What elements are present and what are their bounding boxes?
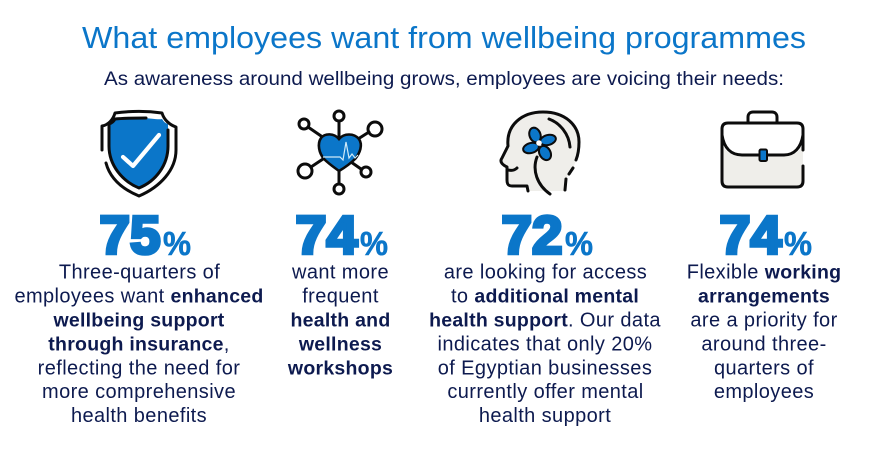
text: flexible working description: arrangements [698, 286, 830, 308]
text: mental health description: currently offer mental [447, 381, 644, 403]
text: mental health description: to additional mental [451, 286, 639, 308]
stat: 72%: 72 [502, 206, 562, 266]
text: flexible working description [687, 262, 841, 403]
text: flexible working description: employees [714, 381, 814, 403]
text: insurance description: more comprehensive [42, 381, 236, 403]
text: workshops description: workshops [287, 358, 393, 380]
icon: briefcase [722, 112, 803, 187]
stat: 74% [720, 206, 812, 266]
icon: shield with check [102, 112, 176, 196]
text: mental health description: health support [479, 405, 611, 427]
text: mental health description: are looking for access [444, 262, 647, 284]
stat: 74%: 74 [720, 206, 782, 266]
stat: 74%: % [784, 225, 812, 262]
subtitle: As awareness around wellbeing grows, employees are voicing their needs: [104, 68, 784, 90]
icon: heart network [298, 111, 382, 194]
text: mental health description: of Egyptian businesses [438, 358, 652, 380]
text: insurance description [14, 262, 264, 427]
panel: insurance support [14, 112, 264, 427]
stat: 75% [100, 206, 191, 266]
panel: workshops [287, 111, 393, 380]
text: insurance description: through insurance, [48, 334, 230, 356]
text: insurance description: Three-quarters of [59, 262, 220, 284]
text: insurance description: wellbeing support [52, 310, 225, 332]
stat: 72% [502, 206, 593, 266]
stat: 74%: 74 [296, 206, 358, 266]
text: mental health description [429, 262, 661, 427]
text: flexible working description: around three- [701, 334, 827, 356]
icon: head with flower [501, 112, 579, 194]
text: workshops description [287, 262, 393, 380]
text: workshops description: health and [290, 310, 391, 332]
text: flexible working description: are a priority for [690, 310, 838, 332]
text: workshops description: frequent [302, 286, 379, 308]
text: insurance description: reflecting the need for [38, 358, 240, 380]
text: workshops description: want more [291, 262, 389, 284]
text: mental health description: indicates that only 20% [438, 334, 652, 356]
stat: 75%: % [163, 225, 191, 262]
text: flexible working description: quarters of [714, 358, 814, 380]
text: flexible working description: Flexible working [687, 262, 841, 284]
text: mental health description: health support. Our data [429, 310, 661, 332]
panel: mental health [429, 112, 661, 427]
text: workshops description: wellness [298, 334, 382, 356]
stat: 74%: % [360, 225, 388, 262]
text: insurance description: employees want enhanced [14, 286, 264, 308]
title: What employees want from wellbeing programmes [82, 20, 806, 55]
text: insurance description: health benefits [71, 405, 207, 427]
panel: flexible working [687, 112, 841, 403]
stat: 72%: % [565, 225, 593, 262]
stat: 75%: 75 [100, 206, 160, 266]
stat: 74% [296, 206, 388, 266]
